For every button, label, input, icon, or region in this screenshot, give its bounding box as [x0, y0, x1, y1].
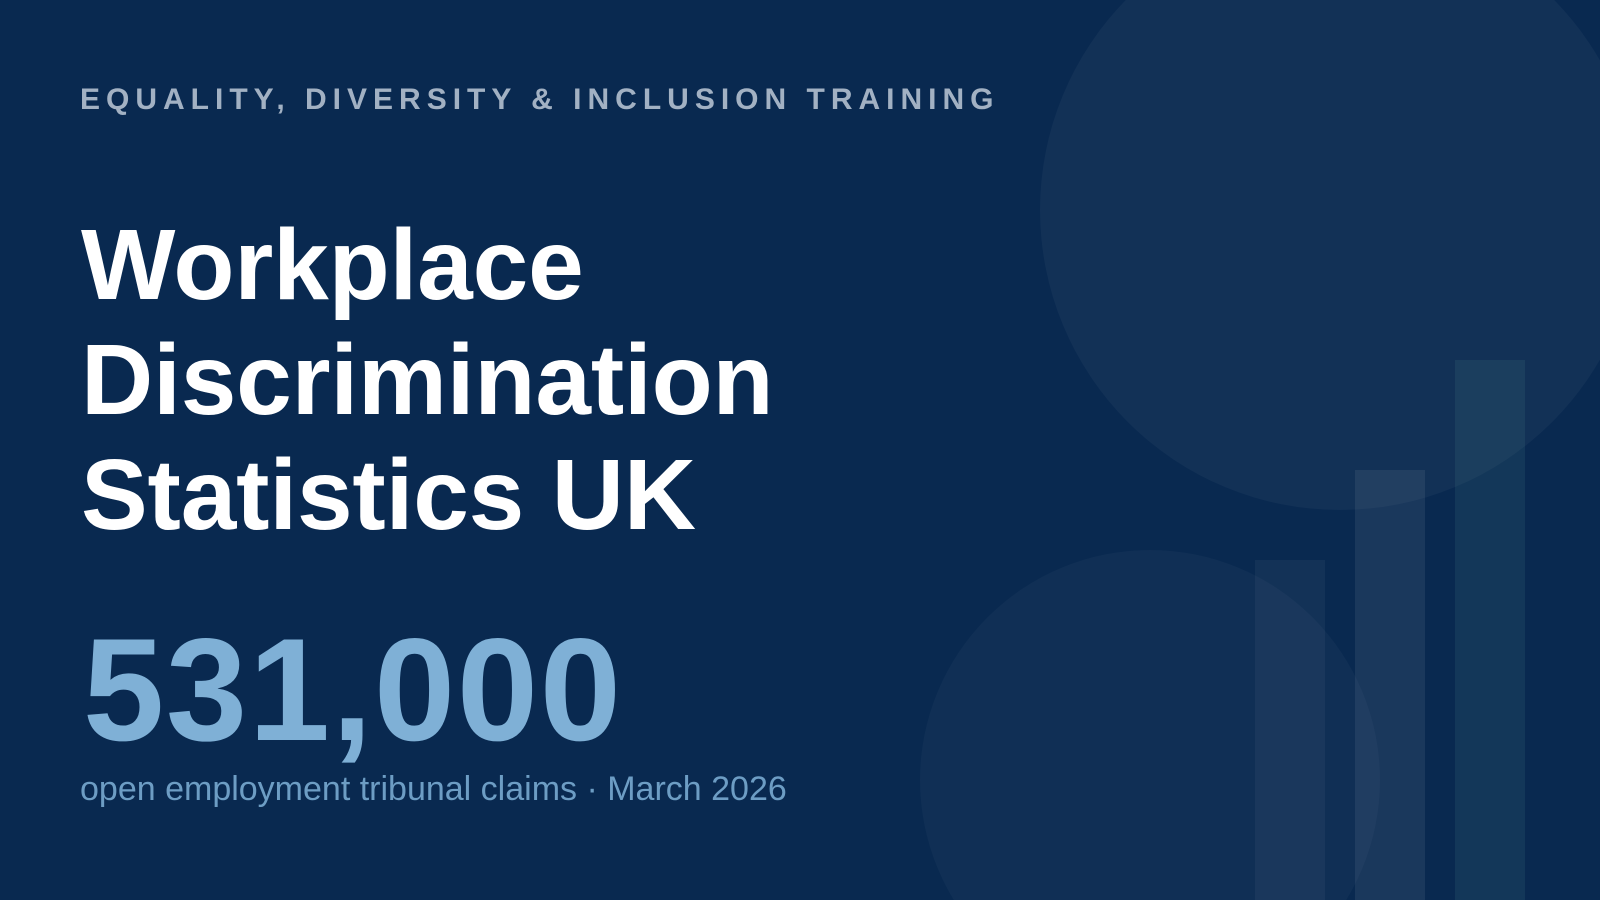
statistic caption: open employment tribunal claims · March 2026 — [80, 770, 787, 808]
title — [81, 208, 773, 550]
large circle top right — [1040, 0, 1600, 510]
title: Statistics UK — [81, 438, 696, 550]
circle bottom — [920, 550, 1380, 900]
key statistic: 531,000 — [83, 608, 623, 770]
decorative bar chart — [1255, 360, 1525, 900]
eyebrow heading: EQUALITY, DIVERSITY & INCLUSION TRAINING — [80, 83, 1000, 116]
title: Workplace — [81, 208, 584, 320]
title: Discrimination — [81, 324, 773, 436]
